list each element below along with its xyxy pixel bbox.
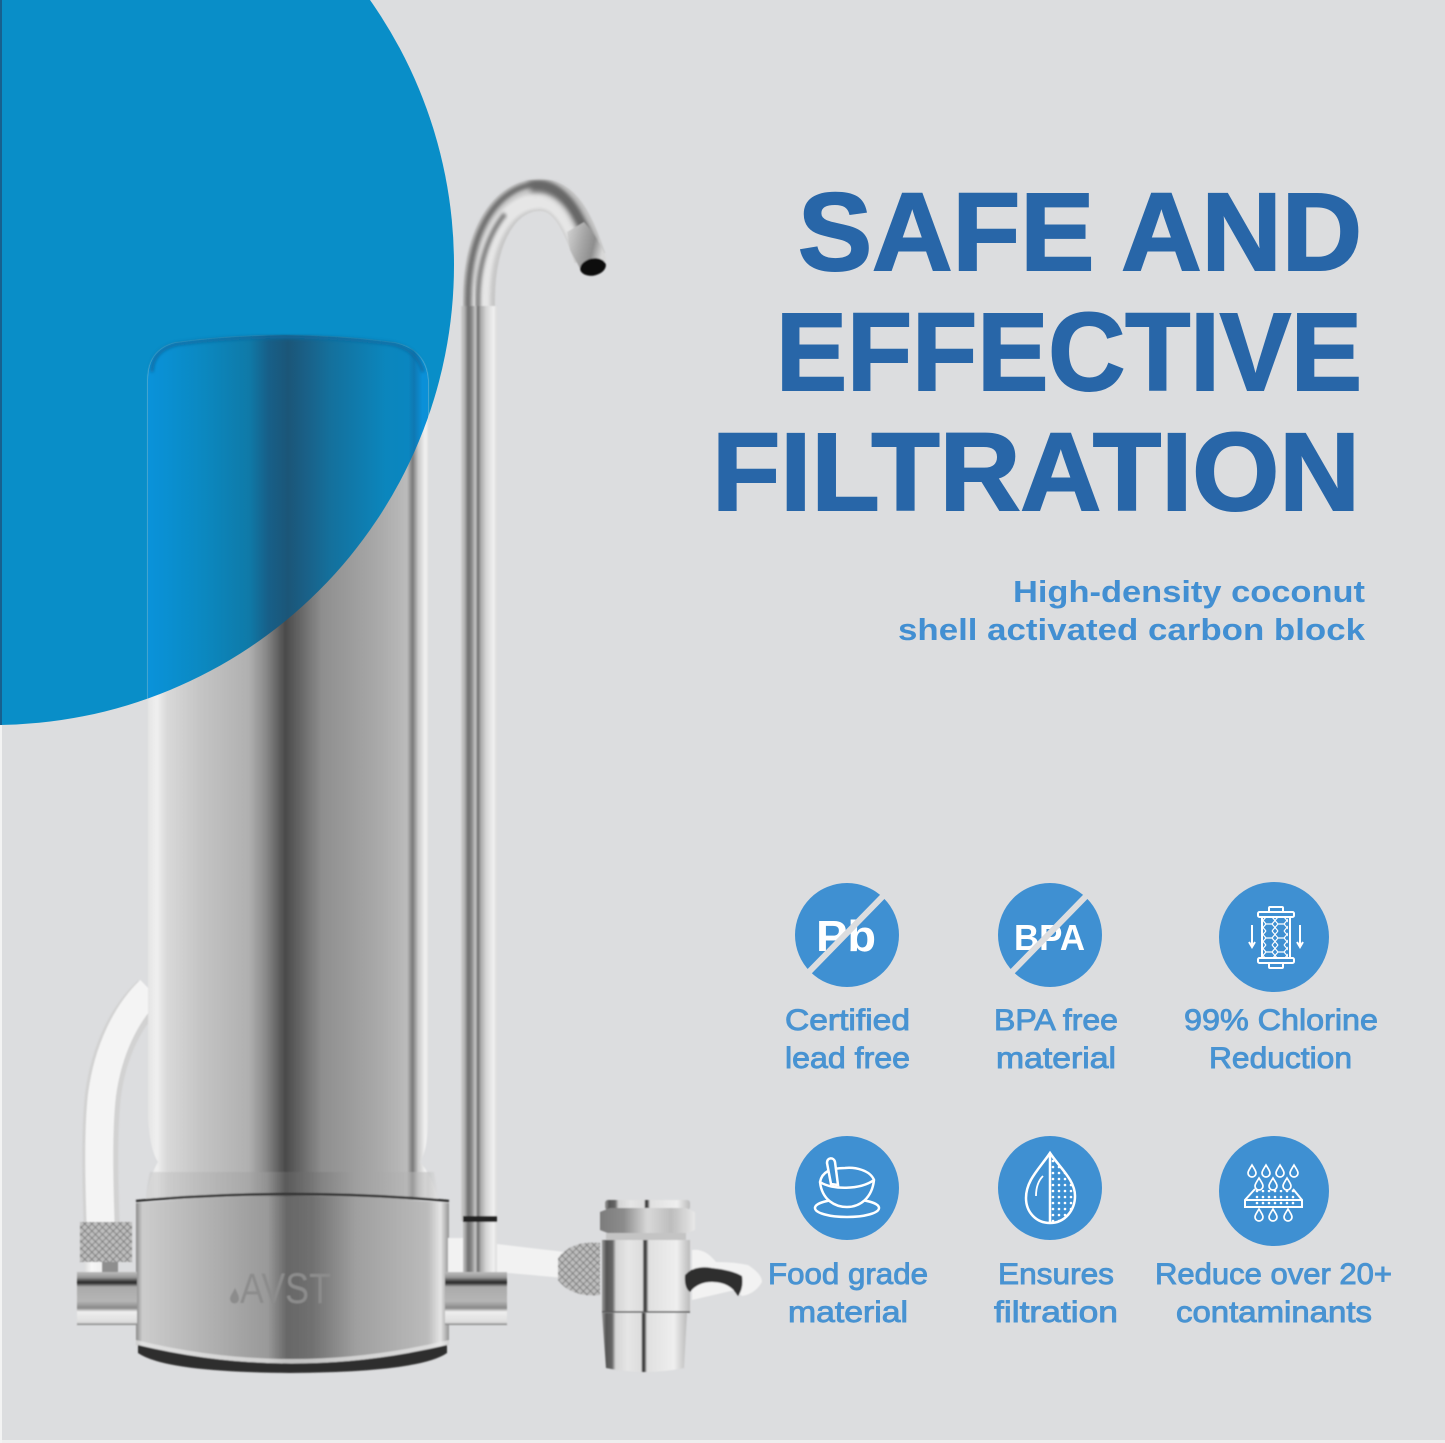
icon: bowl [795, 1136, 899, 1240]
label: Reduction [1209, 1042, 1352, 1075]
label: material [996, 1042, 1116, 1075]
top cap [605, 1200, 690, 1210]
lower body [602, 1313, 687, 1372]
knurled nut [558, 1243, 600, 1295]
faucet outlet [579, 256, 607, 278]
title: SAFE AND [798, 171, 1362, 294]
product: countertop water filter [77, 184, 762, 1373]
label: filtration [994, 1296, 1118, 1329]
label [785, 1004, 910, 1075]
icon: Pb crossed out: Pb [816, 912, 876, 961]
title: EFFECTIVE [776, 291, 1362, 414]
subtitle [898, 574, 1366, 647]
label: Ensures [998, 1258, 1114, 1291]
feature: ensures filtration [994, 1136, 1118, 1329]
neck [606, 1233, 686, 1241]
label [994, 1258, 1118, 1329]
label [994, 1004, 1118, 1075]
icon: BPA crossed out: BPA [1014, 917, 1085, 958]
title [712, 171, 1362, 534]
blue circle backdrop [0, 0, 454, 725]
label [768, 1258, 928, 1329]
label: material [788, 1296, 908, 1329]
filter cylinder [146, 336, 438, 1200]
right fitting [445, 1272, 507, 1325]
left edge strip [0, 0, 2, 725]
label: lead free [785, 1042, 910, 1075]
label: contaminants [1176, 1296, 1372, 1329]
faucet collar [463, 1218, 497, 1274]
label: Certified [785, 1004, 910, 1037]
label: Food grade [768, 1258, 928, 1291]
feature: BPA free material [994, 883, 1118, 1075]
subtitle: shell activated carbon block [898, 612, 1366, 647]
brand logo: AVST [240, 1265, 331, 1313]
icon: half-dotted water drop [998, 1136, 1102, 1240]
feature: certified lead free [785, 883, 910, 1075]
filter base [136, 1194, 449, 1373]
subtitle: High-density coconut [1013, 574, 1365, 609]
hex nut [600, 1208, 695, 1234]
icon: BPA crossed out [998, 883, 1102, 987]
connecting tube [448, 1238, 565, 1278]
feature: reduce over 20+ contaminants [1155, 1136, 1392, 1329]
left fitting [77, 1222, 137, 1325]
white inlet tube [99, 990, 150, 1235]
valve body [602, 1240, 690, 1312]
label [1155, 1258, 1392, 1329]
diverter valve [558, 1200, 762, 1372]
faucet neck [461, 184, 607, 1274]
icon: filter cartridge [1219, 882, 1329, 992]
label: Reduce over 20+ [1155, 1258, 1392, 1291]
feature: food grade material [768, 1136, 928, 1329]
label: BPA free [994, 1004, 1118, 1037]
label [1184, 1004, 1378, 1075]
icon: drops through filter [1219, 1136, 1329, 1246]
feature: 99% chlorine reduction [1184, 882, 1378, 1075]
label: 99% Chlorine [1184, 1004, 1378, 1037]
icon: Pb crossed out [795, 883, 899, 987]
spout [692, 1250, 762, 1300]
filter collar highlight [146, 1172, 438, 1200]
title: FILTRATION [712, 411, 1360, 534]
blue tinted filter top inside the circle [148, 334, 428, 698]
